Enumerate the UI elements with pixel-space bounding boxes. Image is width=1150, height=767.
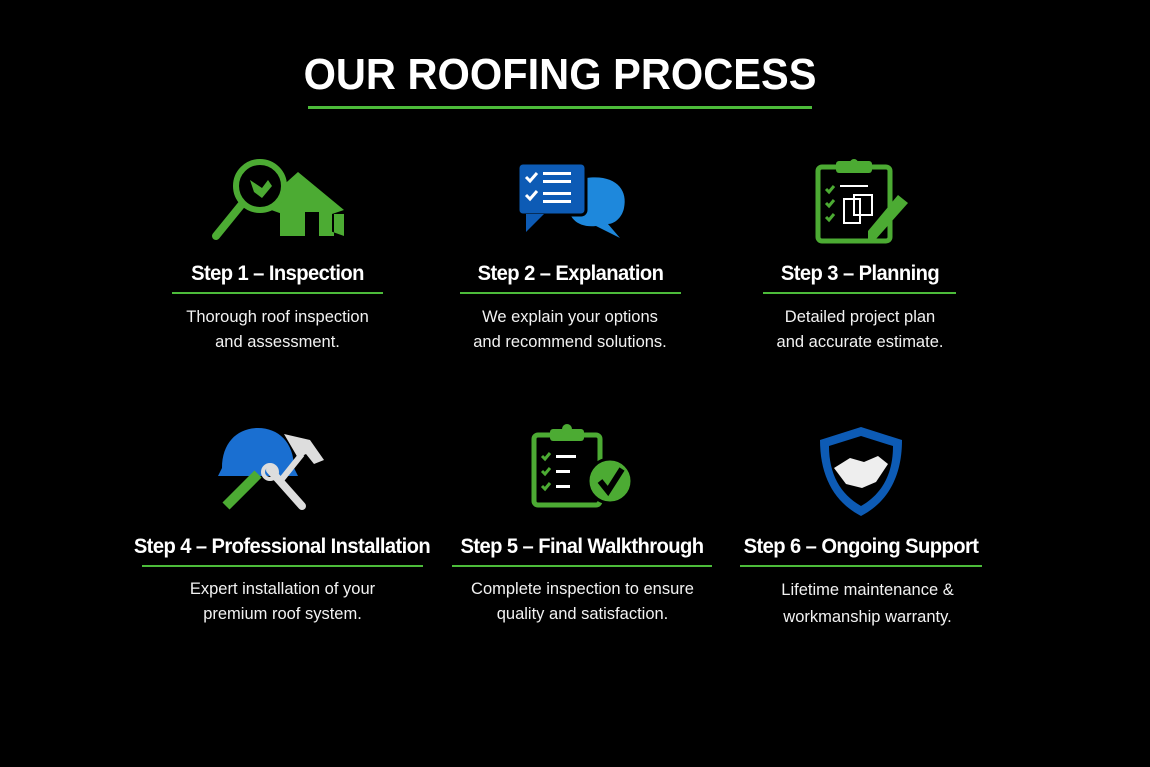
step 5 text: Complete inspection to ensure [471,580,694,598]
step 1 text [186,308,369,350]
step 5 text [471,580,694,622]
step 4 text: premium roof system. [203,604,362,622]
icon: clipboard pencil [816,159,908,244]
title: OUR ROOFING PROCESS [304,50,816,99]
step 2 text: and recommend solutions. [473,332,667,350]
step 4 text [190,580,375,622]
step 5 heading: Step 5 – Final Walkthrough [460,535,704,558]
step 4 heading: Step 4 – Professional Installation [134,535,430,558]
step 6 heading: Step 6 – Ongoing Support [744,535,978,558]
step 1 text: Thorough roof inspection [186,308,369,326]
icon: magnifier house [212,159,344,240]
icon: hard hat and tools [218,428,324,510]
step 5 text: quality and satisfaction. [497,604,668,622]
step 2 text: We explain your options [482,308,658,326]
step 2 text [473,308,667,350]
step 3 heading: Step 3 – Planning [781,262,939,285]
step 3 text: and accurate estimate. [777,332,943,350]
step 6 text: workmanship warranty. [783,608,952,626]
step 3 text [777,308,943,350]
icon: chat bubbles [520,164,625,238]
step 2 heading: Step 2 – Explanation [478,262,663,285]
step 3 text: Detailed project plan [785,308,935,326]
step 1 text: and assessment. [215,332,340,350]
icon: clipboard check [532,424,630,508]
icon: shield handshake [820,427,902,516]
step 6 text: Lifetime maintenance & [781,581,954,599]
step 6 text [781,581,954,626]
step 4 text: Expert installation of your [190,580,375,598]
step 1 heading: Step 1 – Inspection [191,262,364,285]
